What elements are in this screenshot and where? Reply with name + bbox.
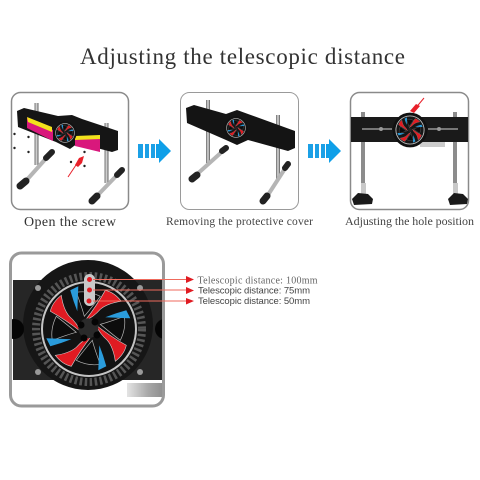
left leg — [192, 100, 226, 179]
fan wheel — [393, 113, 427, 147]
arrow 2 — [308, 139, 341, 163]
slot with red holes — [84, 274, 95, 306]
right leg — [92, 123, 122, 201]
label: 100mm — [93, 276, 318, 286]
left leg — [20, 103, 52, 186]
right leg — [263, 115, 288, 201]
red pointer — [68, 156, 84, 177]
label: 50mm: Telescopic distance: 50mm — [198, 296, 310, 307]
fan wheel — [224, 116, 248, 140]
caption: removing the protective cover: Removing the protective cover — [166, 216, 313, 228]
caption: adjusting the hole position: Adjusting the hole position — [345, 214, 474, 228]
toothed ring — [36, 276, 142, 382]
panel: adjusting the hole — [350, 92, 468, 210]
bar — [351, 117, 468, 147]
panel: open the screw — [12, 92, 128, 210]
label: 100mm: Telescopic distance: 100mm — [198, 276, 318, 286]
label: 75mm — [93, 286, 310, 296]
device bar with colored cover — [17, 108, 118, 152]
label: 50mm — [93, 296, 310, 307]
frame — [10, 253, 164, 406]
label: 75mm: Telescopic distance: 75mm — [198, 286, 310, 296]
hub — [78, 318, 100, 342]
device bar — [186, 105, 295, 151]
fan wheel — [53, 121, 77, 145]
corner notch — [127, 383, 162, 397]
red pointer — [410, 98, 424, 113]
arrow 1 — [138, 139, 171, 163]
panel: wheel detail — [4, 253, 175, 406]
black plate — [12, 260, 162, 390]
panel: removing the cover — [180, 92, 298, 210]
fan blades — [46, 286, 130, 370]
screws — [13, 133, 86, 167]
legs — [352, 112, 468, 205]
title: Adjusting the telescopic distance — [80, 44, 405, 69]
caption: open the screw: Open the screw — [24, 215, 117, 230]
